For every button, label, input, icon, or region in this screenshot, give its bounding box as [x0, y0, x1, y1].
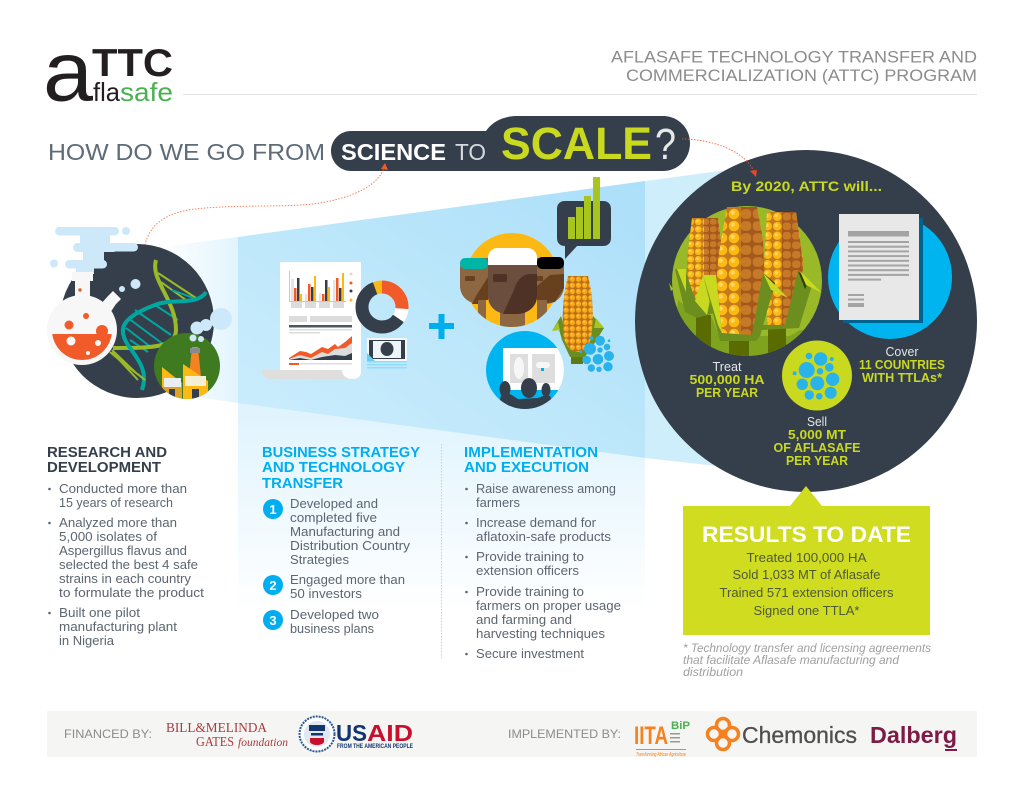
- icon: three corn cobs: [669, 206, 822, 356]
- logo: usaid: FROM THE AMERICAN PEOPLE: [337, 743, 414, 750]
- logo: ATTC aflasafe: [43, 24, 173, 118]
- icon: training classroom: [486, 331, 564, 412]
- column: implementation and execution: Provide training to: [476, 585, 584, 599]
- title: how do we go from science to scale: SCIENCE: [341, 139, 446, 165]
- column: research and development: Analyzed more than: [59, 516, 177, 530]
- column: business strategy and technology transfer: AND TECHNOLOGY: [262, 460, 405, 476]
- icon: factory: [154, 308, 232, 400]
- column: business strategy and technology transfer: Strategies: [290, 553, 349, 567]
- panel: results to date: Sold 1,033 MT of Aflasafe: [732, 568, 881, 582]
- column: research and development: [47, 445, 205, 648]
- title: how do we go from science to scale: HOW DO WE GO FROM: [48, 139, 325, 165]
- title: how do we go from science to scale: ?: [655, 120, 676, 169]
- column: implementation and execution: farmers: [476, 496, 520, 510]
- icon group: research and development: [47, 227, 232, 400]
- column: business strategy and technology transfer: Developed and: [290, 497, 378, 511]
- icon: round flask: [47, 272, 121, 365]
- number badge 1: [263, 499, 283, 519]
- yellow backdrop: [465, 233, 559, 327]
- program name header: [611, 48, 977, 85]
- text: sell target: 5,000 MT: [788, 428, 846, 442]
- column: business strategy and technology transfer: Engaged more than: [290, 573, 405, 587]
- arrow: research to science: [145, 163, 388, 245]
- chart: donut: [362, 287, 402, 327]
- column: implementation and execution: harvesting techniques: [476, 627, 605, 641]
- logo: gates foundation: GATES: [196, 735, 234, 750]
- text: sell target: PER YEAR: [786, 454, 848, 468]
- column: implementation and execution: aflatoxin-safe products: [476, 530, 611, 544]
- back right cob: [762, 212, 822, 330]
- column: business strategy and technology transfer: business plans: [290, 622, 374, 636]
- number badge 3: [263, 610, 283, 630]
- text: treat target: Treat: [712, 360, 742, 374]
- footnote: [683, 643, 931, 679]
- arrow: scale to targets: [682, 139, 757, 177]
- logo: usaid: [300, 716, 414, 752]
- chart: area chart: [289, 336, 352, 365]
- column: implementation and execution: AND EXECUTION: [464, 460, 589, 476]
- text: treat target: PER YEAR: [696, 386, 758, 400]
- title: how do we go from science to scale: TO: [455, 139, 486, 165]
- background beam: research to strategy: [160, 169, 735, 612]
- column: research and development: strains in each country: [59, 572, 192, 586]
- text: treat target: 500,000 HA: [690, 373, 764, 387]
- column: research and development: Conducted more than: [59, 482, 187, 496]
- logo: ATTC aflasafe: a: [43, 24, 93, 118]
- icon group: farmers: [460, 233, 564, 330]
- back left cob: [669, 218, 722, 318]
- column: business strategy and technology transfer: [262, 445, 420, 636]
- logo: ATTC aflasafe: safe: [120, 77, 173, 107]
- text: cover target: WITH TTLAs*: [862, 371, 942, 385]
- column: research and development: 15 years of research: [59, 496, 173, 510]
- panel: results to date: RESULTS TO DATE: [702, 522, 911, 547]
- title: how do we go from science to scale: [48, 116, 690, 171]
- column: implementation and execution: Increase demand for: [476, 516, 596, 530]
- label: financed by: FINANCED BY:: [64, 727, 152, 741]
- panel: results to date: Trained 571 extension officers: [720, 586, 894, 600]
- logo: dalberg: Dalberg: [870, 722, 957, 748]
- heading: by 2020: By 2020, ATTC will...: [731, 178, 882, 194]
- icon: right farmer: [537, 257, 564, 304]
- column: research and development: Aspergillus flavus and: [59, 544, 187, 558]
- column: business strategy and technology transfer: Manufacturing and: [290, 525, 400, 539]
- panel: by 2020 targets circle: [635, 150, 977, 492]
- logo: gates foundation: [166, 721, 288, 750]
- column: implementation and execution: extension officers: [476, 564, 579, 578]
- icon: DNA helix: [110, 260, 206, 390]
- text: sell target: Sell: [807, 415, 827, 429]
- column: implementation and execution: Provide training to: [476, 550, 584, 564]
- icon: dark science circle: [60, 244, 214, 398]
- logo: iita bip: IITA: [634, 722, 668, 750]
- text: cover target: Cover: [886, 345, 918, 359]
- program name header: AFLASAFE TECHNOLOGY TRANSFER AND: [611, 48, 977, 66]
- icon: small corn cob with bubbles: [552, 276, 614, 372]
- logo: ATTC aflasafe: fla: [93, 77, 121, 107]
- column: implementation and execution: Raise awareness among: [476, 482, 616, 496]
- number badge 3: 3: [269, 613, 277, 628]
- column: implementation and execution: IMPLEMENTATION: [464, 445, 598, 461]
- footnote: that facilitate Aflasafe manufacturing and: [683, 655, 900, 667]
- column: implementation and execution: and farming and: [476, 613, 572, 627]
- column: business strategy and technology transfer: completed five: [290, 511, 377, 525]
- icon: aflasafe bubbles: [782, 340, 852, 410]
- title: how do we go from science to scale: SCALE: [501, 118, 652, 169]
- number badge 2: 2: [269, 578, 277, 593]
- label: implemented by: IMPLEMENTED BY:: [508, 727, 621, 741]
- column: implementation and execution: farmers on proper usage: [476, 599, 621, 613]
- column: research and development: Built one pilot: [59, 606, 141, 620]
- column: research and development: 5,000 isolates of: [59, 530, 158, 544]
- number badge 2: [263, 575, 283, 595]
- column: business strategy and technology transfer: TRANSFER: [262, 476, 344, 492]
- icon group: business strategy document: [262, 262, 407, 379]
- footer band: funders and implementers: [47, 711, 977, 758]
- footnote: distribution: [683, 667, 743, 679]
- icon: license document: [828, 214, 952, 339]
- icon: paper roll: [262, 370, 361, 379]
- text: sell target: OF AFLASAFE: [774, 441, 860, 455]
- icon: left farmer: [460, 258, 488, 304]
- column: business strategy and technology transfer: 50 investors: [290, 587, 362, 601]
- column: business strategy and technology transfer: Developed two: [290, 608, 379, 622]
- footnote: * Technology transfer and licensing agreements: [683, 643, 931, 655]
- column: research and development: in Nigeria: [59, 634, 114, 648]
- logo: chemonics: Chemonics: [742, 722, 857, 748]
- text: cover target: 11 COUNTRIES: [859, 358, 945, 372]
- logo: usaid: US: [336, 720, 367, 746]
- panel: results to date: Treated 100,000 HA: [746, 551, 867, 565]
- column: research and development: DEVELOPMENT: [47, 460, 161, 476]
- program name header: COMMERCIALIZATION (ATTC) PROGRAM: [626, 66, 977, 85]
- column: business strategy and technology transfer: BUSINESS STRATEGY: [262, 445, 420, 461]
- column: research and development: selected the best 4 safe: [59, 558, 198, 572]
- logo: ATTC aflasafe: TTC: [92, 42, 173, 85]
- text lines in document: [289, 316, 352, 334]
- text: treat target: [690, 360, 764, 400]
- panel: results to date: [683, 486, 930, 635]
- front center cob: [703, 207, 788, 341]
- logo: iita bip: BiP: [671, 720, 690, 732]
- column: business strategy and technology transfer: Distribution Country: [290, 539, 411, 553]
- icon: banknote: [367, 338, 407, 368]
- panel: results to date: Signed one TTLA*: [754, 604, 860, 618]
- icon: plus sign: [429, 314, 454, 339]
- column: research and development: to formulate the product: [59, 586, 205, 600]
- column: implementation and execution: [464, 445, 621, 661]
- chart: small bar chart: [289, 271, 352, 308]
- logo: gates foundation: foundation: [238, 737, 288, 749]
- logo: chemonics: [708, 718, 857, 750]
- column: research and development: manufacturing plant: [59, 620, 178, 634]
- icon: center farmer: [478, 300, 547, 330]
- icon: speech bubble with rising bars: [557, 177, 611, 259]
- logo: gates foundation: BILL&MELINDA: [166, 721, 268, 736]
- logo: iita bip: Transforming African Agriculture: [636, 752, 686, 758]
- column: implementation and execution: Secure investment: [476, 647, 585, 661]
- text: cover target: [859, 345, 945, 385]
- column: research and development: RESEARCH AND: [47, 445, 167, 461]
- number badge 1: 1: [269, 502, 277, 517]
- logo: usaid: AID: [367, 720, 413, 746]
- logo: iita bip: [634, 720, 690, 758]
- icon: vapour clouds: [50, 227, 138, 274]
- text: sell target: [774, 415, 860, 468]
